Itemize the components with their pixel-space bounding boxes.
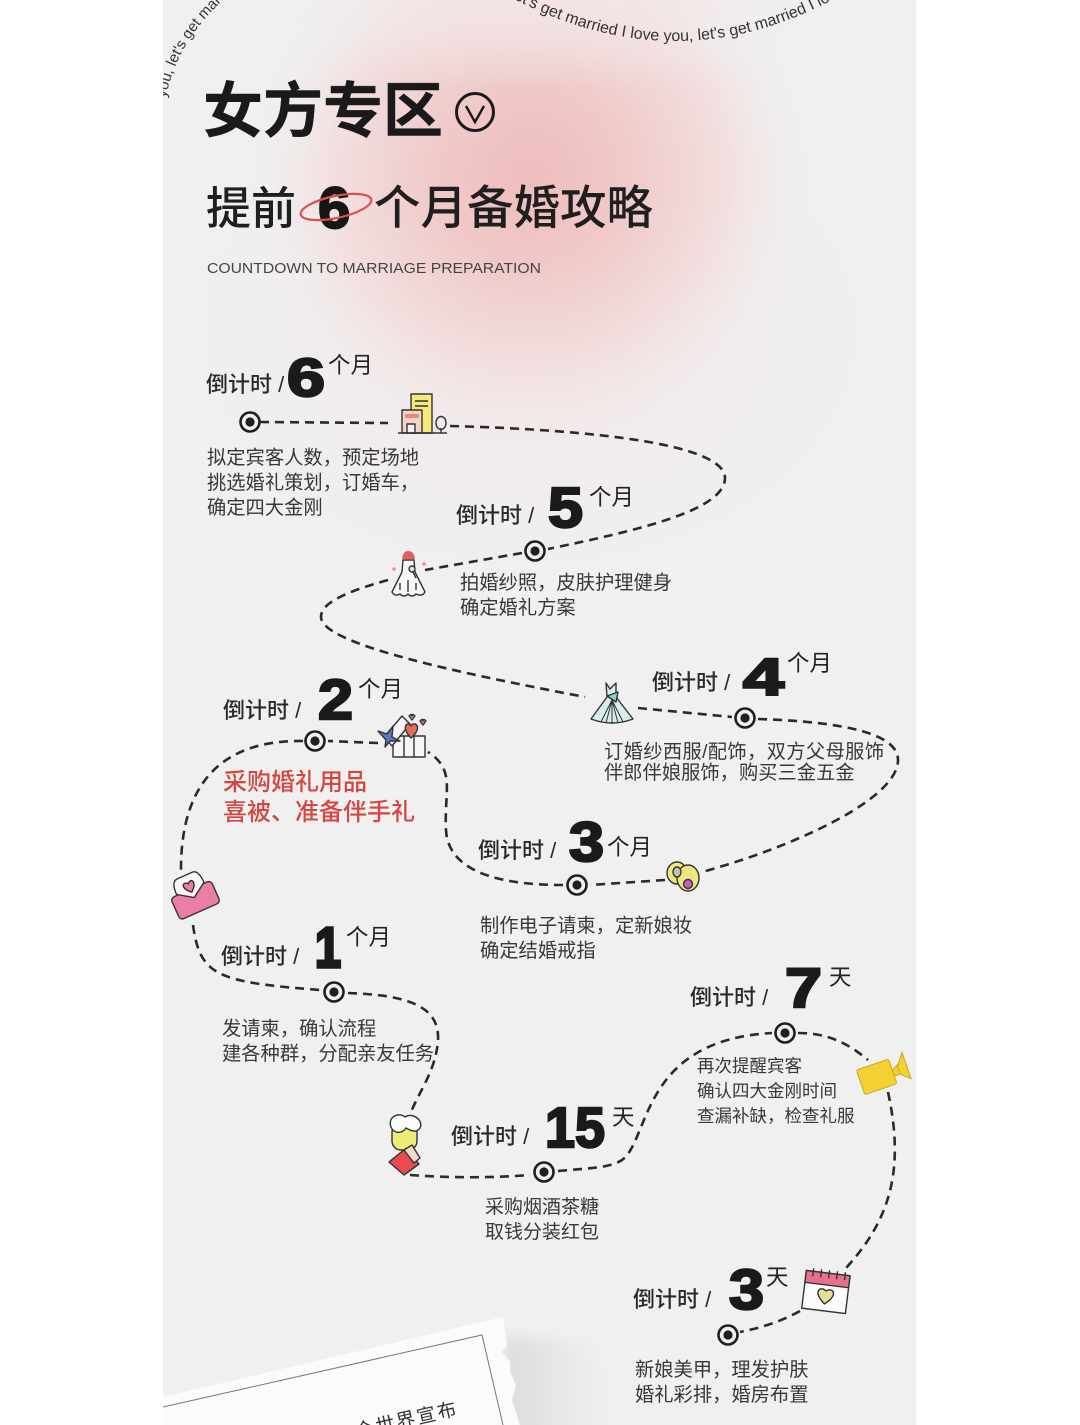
subtitle <box>206 176 653 241</box>
step: 2 months: 2 <box>318 668 353 732</box>
curved tagline: top <box>516 0 829 44</box>
step: 6 months <box>206 348 447 519</box>
text: 拟定宾客人数，预定场地 <box>207 447 419 469</box>
step: 2 months: 个月 <box>358 677 403 702</box>
step: 3 months <box>478 810 699 962</box>
text: 查漏补缺，检查礼服 <box>697 1106 854 1126</box>
text: 制作电子请柬，定新娘妆 <box>480 915 692 937</box>
card shadow <box>504 1336 568 1425</box>
icon: video camera <box>856 1052 911 1095</box>
step: 3 days: 3 <box>729 1258 764 1322</box>
text: 确定结婚戒指 <box>480 940 596 962</box>
node <box>526 542 544 560</box>
bottom card <box>163 1317 568 1425</box>
subtitle: 个月备婚攻略 <box>374 182 653 234</box>
text: 建各种群，分配亲友任务 <box>222 1043 434 1065</box>
step: 4 months: 倒计时 / <box>652 670 731 695</box>
step: 7 days: 倒计时 / <box>690 985 769 1010</box>
text: 拍婚纱照，皮肤护理健身 <box>460 572 672 594</box>
icon: evening gown <box>591 683 633 724</box>
node <box>306 732 324 750</box>
title: 女方专区 <box>203 78 443 145</box>
text: 再次提醒宾客 <box>697 1056 802 1076</box>
text: 订婚纱西服/配饰，双方父母服饰 <box>604 741 884 763</box>
red highlighted text: 喜被、准备伴手礼 <box>223 799 415 826</box>
step: 3 months: 倒计时 / <box>478 838 557 863</box>
icon: gift <box>378 714 426 757</box>
step: 1 month <box>221 916 434 1065</box>
big six with ring <box>298 176 374 241</box>
step: 5 months: 个月 <box>589 485 634 510</box>
node <box>240 412 260 432</box>
node <box>718 1326 738 1344</box>
card inner line <box>163 1335 503 1425</box>
text: 发请柬，确认流程 <box>222 1018 376 1040</box>
text: 确定婚礼方案 <box>460 597 576 619</box>
text: 确定四大金刚 <box>207 497 323 519</box>
step: 15 days <box>451 1096 635 1243</box>
icon: rings <box>667 862 699 891</box>
step: 7 days <box>690 956 854 1126</box>
step: 6 months: 个月 <box>328 353 373 378</box>
step: 5 months: 5 <box>548 476 583 540</box>
step: 3 months: 3 <box>569 810 604 873</box>
text: 新娘美甲，理发护肤 <box>635 1359 809 1381</box>
red highlighted text: 采购婚礼用品 <box>223 769 367 796</box>
node <box>776 1024 794 1042</box>
step: 1 month: 个月 <box>346 925 391 950</box>
icon: chevron circle <box>456 94 494 130</box>
step: 4 months <box>591 649 884 784</box>
icon: beer and cigarettes <box>389 1115 421 1175</box>
text: 采购烟酒茶糖 <box>485 1196 599 1218</box>
node <box>568 876 586 894</box>
step: 2 months <box>223 668 426 826</box>
icon: wedding dress <box>392 551 426 596</box>
step: 6 months: 倒计时 / <box>206 372 285 397</box>
card paper <box>163 1317 520 1425</box>
big six with ring: 6 <box>318 176 350 241</box>
step: 3 days <box>633 1258 850 1406</box>
step: 15 days: 15 <box>545 1096 605 1160</box>
subtitle: 提前 <box>206 183 296 234</box>
node <box>534 1162 554 1182</box>
step: 3 days: 天 <box>766 1265 789 1290</box>
text: 取钱分装红包 <box>485 1221 599 1243</box>
step: 15 days: 倒计时 / <box>451 1124 530 1149</box>
text: 确认四大金刚时间 <box>697 1081 837 1101</box>
page background <box>163 0 916 1425</box>
step: 3 months: 个月 <box>607 835 652 860</box>
text: 挑选婚礼策划，订婚车， <box>207 472 419 494</box>
node <box>324 982 344 1002</box>
english subtitle: COUNTDOWN TO MARRIAGE PREPARATION <box>207 260 541 277</box>
text: 婚礼彩排，婚房布置 <box>635 1384 809 1406</box>
step: 6 months: 6 <box>287 348 325 408</box>
node <box>736 708 754 728</box>
step: 1 month: 1 <box>315 916 341 980</box>
step: 4 months: 个月 <box>787 651 832 676</box>
icon: venue <box>398 394 447 433</box>
step: 7 days: 天 <box>829 965 852 990</box>
text: 伴郎伴娘服饰，购买三金五金 <box>604 762 855 784</box>
step: 5 months <box>392 476 672 619</box>
curved tagline: left <box>163 0 223 98</box>
icon: love letter <box>164 867 221 920</box>
dashed route <box>181 422 898 1332</box>
step: 3 days: 倒计时 / <box>633 1287 712 1312</box>
step: 2 months: 倒计时 / <box>223 698 302 723</box>
step: 5 months: 倒计时 / <box>456 503 535 528</box>
step: 1 month: 倒计时 / <box>221 944 300 969</box>
icon: calendar <box>802 1267 850 1314</box>
step: 15 days: 天 <box>612 1105 635 1130</box>
step: 7 days: 7 <box>785 956 822 1019</box>
step: 4 months: 4 <box>743 649 784 707</box>
